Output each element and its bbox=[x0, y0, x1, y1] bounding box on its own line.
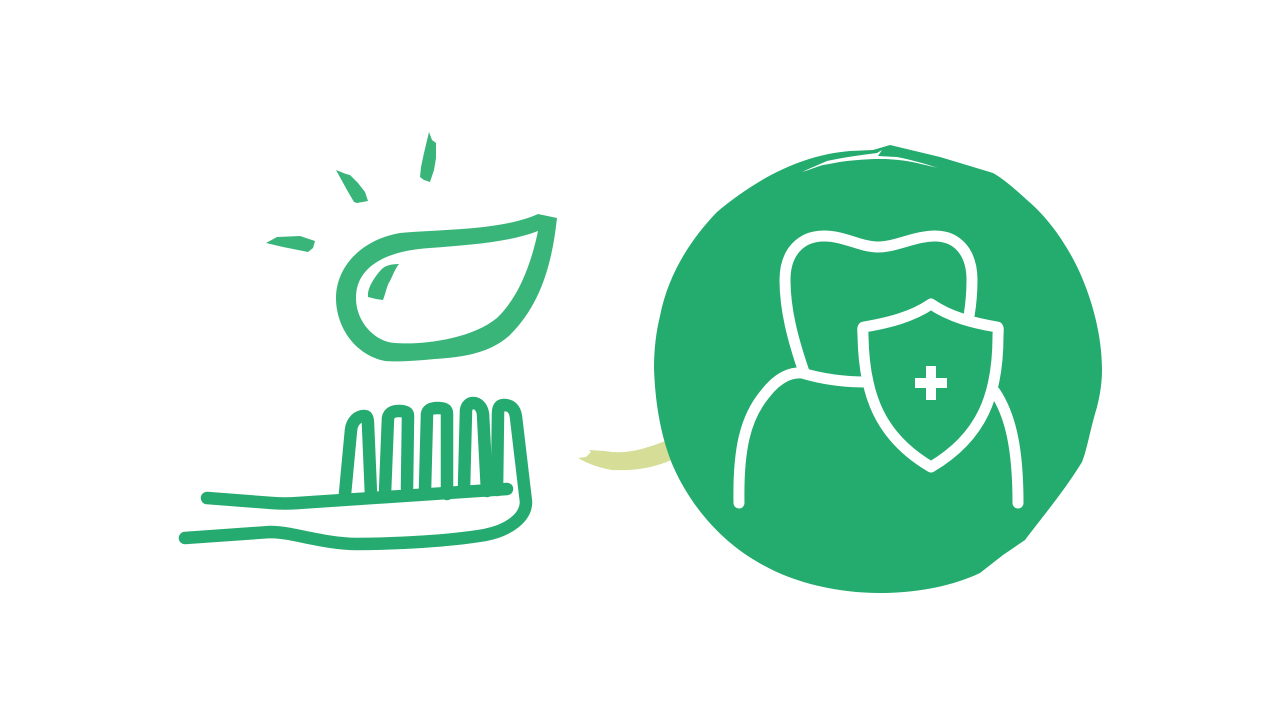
bristle 1 bbox=[345, 416, 371, 495]
shine ray middle bbox=[336, 170, 368, 203]
shoulder right bbox=[995, 392, 1018, 503]
shine ray top bbox=[420, 132, 436, 182]
shield cross bbox=[915, 366, 947, 400]
shine ray left bbox=[266, 236, 315, 252]
bristle 4 bbox=[464, 403, 487, 491]
brush handle bottom edge and head bbox=[185, 405, 526, 544]
icon: tooth with shield bbox=[739, 236, 1018, 503]
yellow brush stroke bbox=[578, 440, 676, 470]
panel: green brushed circle bbox=[654, 145, 1102, 593]
brush handle top edge bbox=[207, 489, 507, 504]
white brush streak bbox=[802, 150, 938, 172]
paste highlight bbox=[368, 264, 399, 300]
bristle 3 bbox=[425, 408, 447, 494]
toothpaste dab bbox=[336, 214, 557, 361]
bristle 2 bbox=[385, 411, 408, 493]
icon: toothbrush bbox=[185, 403, 526, 544]
icon: toothpaste dab with shine bbox=[266, 132, 557, 361]
tooth outline bbox=[785, 236, 972, 372]
green blob bbox=[654, 145, 1102, 593]
person shoulder and neck left bbox=[739, 373, 866, 503]
shield outline bbox=[863, 304, 998, 467]
